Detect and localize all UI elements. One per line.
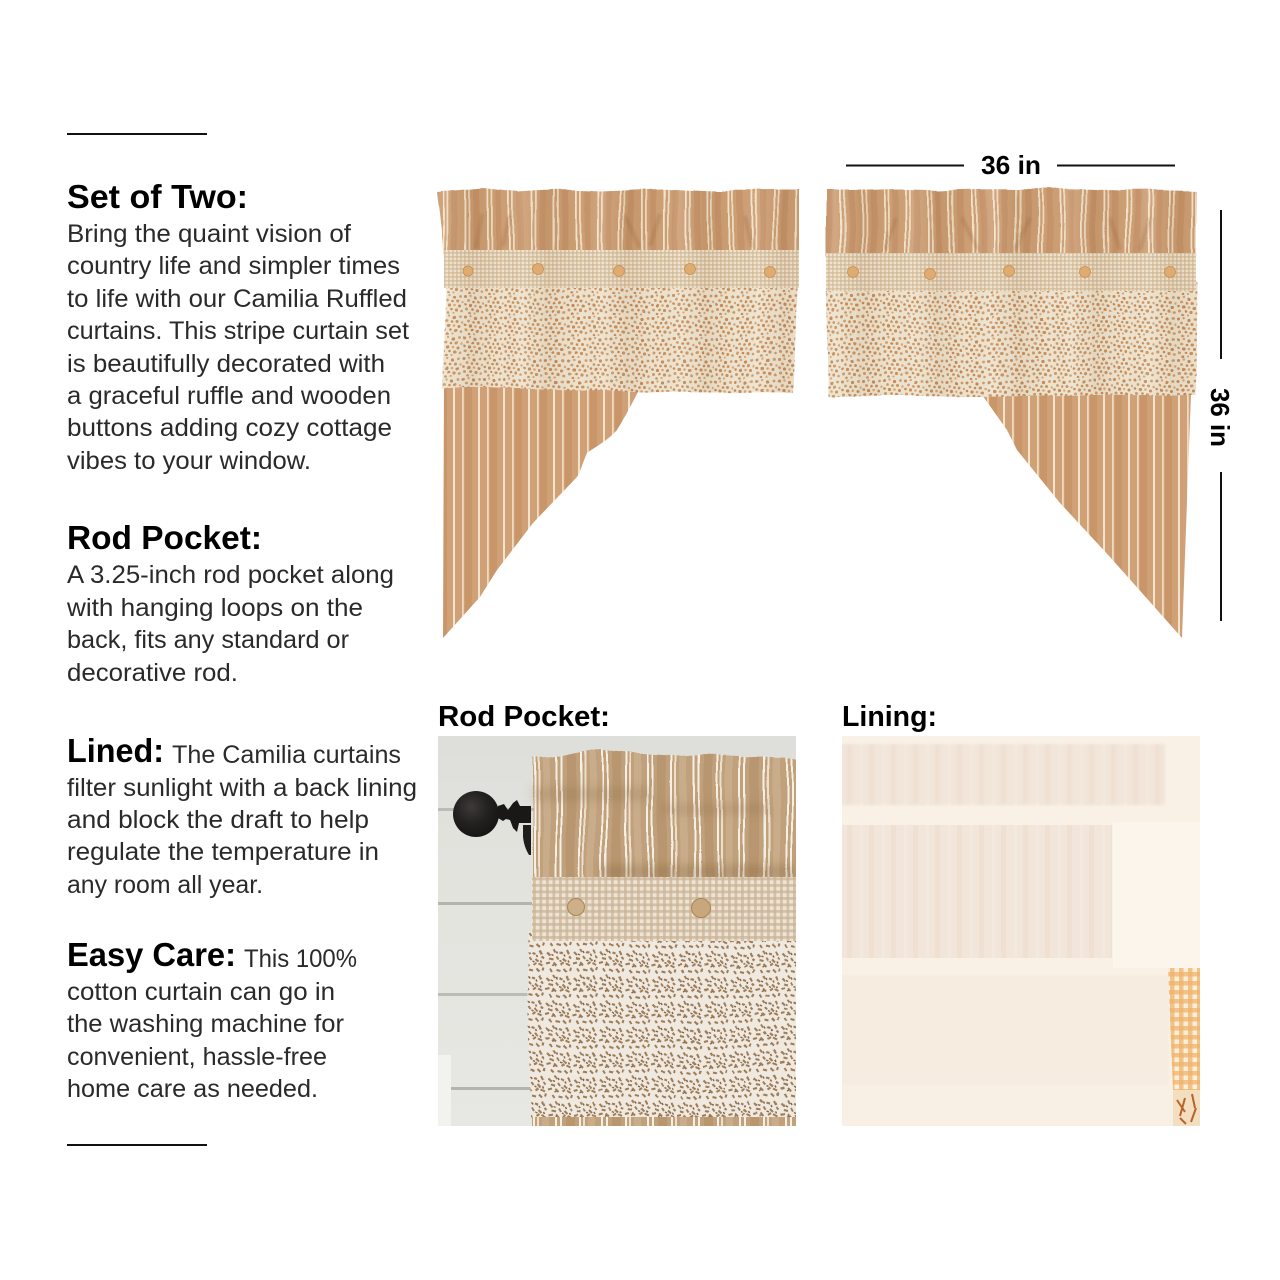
text block: Lined: regulate the temperature in [67,838,379,866]
text block: Easy Care: This 100% [244,945,357,973]
photo: rod pocket detail [438,736,800,1126]
shadow bands [532,788,796,878]
right curtain swag [825,188,1197,638]
text block: Easy Care [67,936,357,1103]
gingham band [444,250,799,288]
floral corner [1173,1090,1200,1126]
text block: Rod Pocket: back, fits any standard or [67,626,349,654]
bottom rule [67,1144,207,1146]
text block: Lined: The Camilia curtains [172,741,401,769]
heading: Set of Two: Set of Two: [67,178,248,215]
curtain: rod pocket stripes [532,749,800,879]
white hem block [1113,822,1200,968]
floral band [825,280,1196,396]
curtain: lower stripes [532,1117,796,1126]
gingham band [826,253,1196,291]
photo: lining detail [838,736,1200,1130]
text block: Set of Two: to life with our Camilia Ruffled [67,285,407,313]
tail [980,392,1191,638]
text block: Set of Two: vibes to your window. [67,447,311,475]
wall [438,736,796,1126]
curtain: gingham band [532,877,796,941]
text block: Set of Two: buttons adding cozy cottage [67,414,392,442]
orange gingham strip [1168,968,1200,1090]
text block: Rod Pocket [66,519,394,687]
ruffle [437,188,799,254]
curtain: floral panel [530,930,800,1118]
heading: Lined: Lined: [67,732,164,769]
ruffle pinches [885,218,1150,250]
heading: Rod Pocket photo: Rod Pocket: [438,701,610,733]
text block: Lined [67,732,417,899]
chair [438,1055,451,1126]
floral band [444,278,797,392]
text block: Lined: and block the draft to help [67,806,369,834]
text block: Rod Pocket: A 3.25-inch rod pocket along [67,561,394,589]
text block: Lined: any room all year. [67,871,263,899]
left curtain swag [437,188,799,638]
text block: Lined: filter sunlight with a back lining [67,774,417,802]
text block: Easy Care: home care as needed. [67,1075,318,1103]
text block: Rod Pocket: with hanging loops on the [66,594,363,622]
top rule [67,133,207,135]
text block: Set of Two: a graceful ruffle and wooden [67,382,391,410]
height dimension: 36 in: 36 in [1205,388,1235,447]
text block: Set of Two: curtains. This stripe curtain set [67,317,409,345]
ruffle pinches [476,214,752,248]
sheer panel: middle [838,825,1112,958]
curtain rod with finial [453,791,531,855]
text block: Set of Two: country life and simpler times [67,252,400,280]
buttons [848,266,1176,280]
text block: Rod Pocket: decorative rod. [67,659,238,687]
width dimension: 36 in: 36 in [981,150,1041,180]
buttons [568,898,584,916]
heading: Easy Care: Easy Care: [67,936,236,973]
buttons [463,264,776,278]
text block: Set of Two: Bring the quaint vision of [67,220,351,248]
text block: Easy Care: cotton curtain can go in [67,978,335,1006]
text block: Set of Two: is beautifully decorated with [67,350,385,378]
heading: Rod Pocket: Rod Pocket: [67,519,262,556]
tail [443,386,641,638]
text block: Easy Care: the washing machine for [67,1010,344,1038]
lower lining [838,975,1169,1085]
text block: Set of Two [67,178,409,475]
text block: Easy Care: convenient, hassle-free [67,1043,327,1071]
heading: Lining photo: Lining: [842,701,937,733]
sheer panel: top [838,744,1165,805]
ruffle [826,188,1197,256]
